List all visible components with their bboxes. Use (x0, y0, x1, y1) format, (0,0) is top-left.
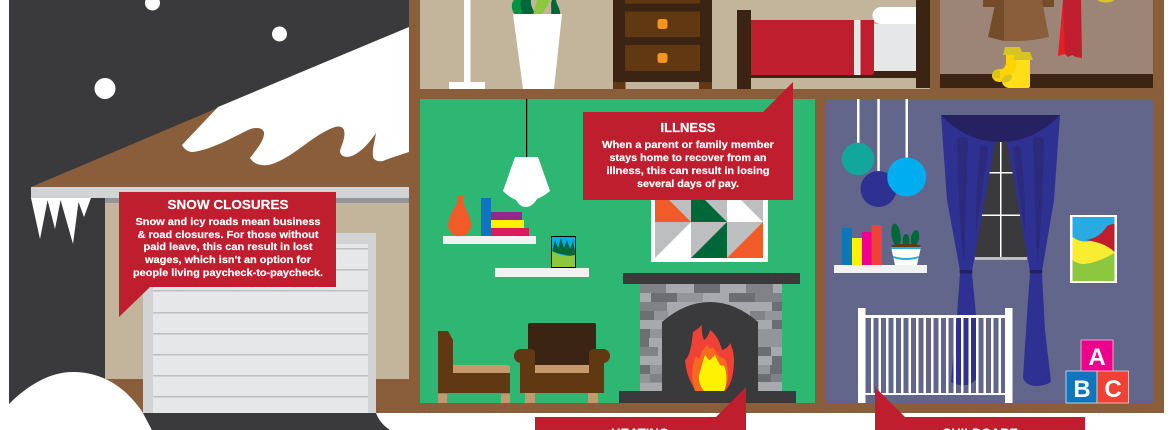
window (975, 142, 1027, 260)
callout: snow closures (119, 192, 336, 317)
callout: illness: ILLNESS (660, 121, 716, 135)
potted plant (512, 0, 562, 89)
callout: snow closures: wages, which isn't an option for (144, 254, 311, 266)
hat edge (1098, 0, 1114, 2)
geometric wall art (651, 186, 768, 262)
alphabet blocks: C (1104, 376, 1122, 403)
gutter (31, 187, 409, 203)
living room (420, 99, 815, 403)
callout: snow closures: Snow and icy roads mean business (136, 216, 321, 228)
ground snow and driveway (0, 372, 410, 430)
callout: heating (535, 387, 746, 430)
flame (685, 325, 734, 391)
fireplace (619, 273, 800, 403)
pendant lamp (503, 99, 550, 207)
wall shelf with vase and books (443, 195, 536, 244)
alphabet blocks: B (1073, 376, 1091, 403)
snowflakes (94, 0, 287, 99)
callout: illness: stays home to recover from an (610, 152, 766, 164)
garage door (143, 233, 376, 413)
alphabet blocks (1066, 340, 1128, 403)
bedroom room (420, 0, 930, 89)
garage building (31, 27, 409, 413)
callout: illness (583, 82, 793, 200)
curtains (941, 115, 1060, 386)
callout: illness: several days of pay. (637, 178, 739, 190)
chaise seat (438, 331, 510, 403)
wall shelf with books and plant (834, 223, 927, 273)
floor lamp (449, 0, 485, 89)
callout: snow closures: & road closures. For those without (138, 229, 319, 241)
house frame (409, 0, 1164, 413)
scarf (1058, 0, 1082, 58)
callout: snow closures: people living paycheck-to-paycheck. (133, 267, 323, 279)
lower shelf with picture (495, 236, 589, 277)
night sky background (9, 0, 409, 430)
roof snow (182, 27, 409, 165)
dresser (613, 0, 712, 89)
hanging mobile (842, 99, 926, 207)
coat (983, 0, 1054, 41)
callout: snow closures: paid leave, this can result in lost (144, 241, 313, 253)
crib (858, 308, 1012, 403)
closet room (940, 0, 1153, 88)
callout: illness: When a parent or family member (602, 139, 774, 151)
armchair (514, 323, 610, 403)
alphabet blocks: A (1088, 344, 1106, 371)
rain boots (992, 47, 1033, 88)
abstract poster (1070, 215, 1117, 283)
icicles (31, 198, 91, 244)
callout: childcare (875, 387, 1085, 430)
bed (737, 0, 930, 89)
nursery room (826, 99, 1153, 403)
callout: snow closures: SNOW CLOSURES (168, 198, 288, 212)
callout: illness: illness, this can result in losing (606, 165, 770, 177)
